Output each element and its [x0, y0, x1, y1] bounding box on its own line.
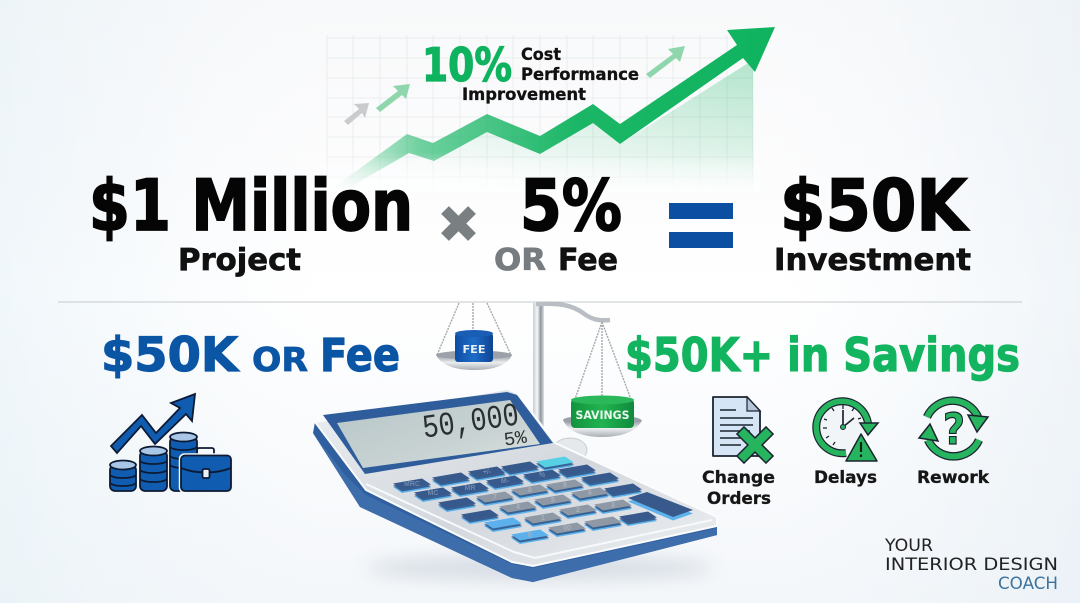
performance label: Performance	[521, 65, 639, 84]
calculator top face	[315, 389, 717, 566]
heading: $50K OR Fee	[101, 328, 400, 383]
keypad: 9	[563, 482, 567, 489]
term: 5% OR Fee: Fee	[558, 243, 618, 278]
label: rework: Rework	[917, 468, 990, 488]
small arrow: light green	[376, 84, 410, 112]
display reading 5%: 5%	[502, 426, 529, 452]
term: $1 Million Project: $1 Million	[89, 165, 413, 247]
display bezel	[323, 392, 553, 474]
calculator body	[313, 389, 717, 582]
multiply sign	[445, 210, 472, 237]
keypad: 00	[563, 525, 571, 532]
icon: coins, rising arrow and briefcase	[110, 394, 232, 492]
keypad: 2	[576, 507, 580, 514]
equation	[89, 165, 971, 278]
keypad: 5	[551, 497, 555, 504]
label: change orders	[702, 468, 775, 509]
coin stack small	[110, 460, 136, 491]
chart bottom fade	[320, 152, 760, 192]
face rim highlight	[366, 484, 712, 558]
coin stack medium	[140, 446, 167, 491]
term: $1 Million Project	[89, 165, 413, 278]
scale beam	[536, 304, 610, 320]
icon: rework arrows: ?	[943, 405, 965, 455]
callout: 10% cost performance improvement	[422, 38, 639, 104]
equals sign	[669, 203, 733, 248]
display reading 50,000: 50,000	[420, 398, 521, 448]
LCD screen	[337, 400, 540, 468]
heading: $50K+ in Savings: $50K+ in Savings	[625, 328, 1020, 382]
logo: your interior design coach	[884, 536, 1058, 593]
keypad: MR	[465, 485, 475, 492]
keypad: %	[539, 472, 546, 479]
10% figure: 10%	[422, 38, 512, 92]
keypad: 0	[528, 532, 532, 539]
term: 5% OR Fee: 5%	[520, 165, 622, 247]
term: 5% OR Fee: OR	[494, 243, 546, 278]
keypad: M-	[501, 478, 510, 485]
heading: $50K OR Fee: OR	[252, 340, 308, 379]
scale pole	[533, 303, 544, 428]
right pan with savings block: SAVINGS	[576, 408, 630, 422]
chart area fill	[333, 60, 753, 190]
keypad: 1	[541, 515, 545, 522]
calculator shadow	[365, 556, 715, 580]
cost label: Cost	[521, 45, 561, 64]
term: $50K Investment: $50K	[780, 165, 970, 247]
left pan with fee block: FEE	[462, 344, 486, 356]
term: $50K Investment	[774, 165, 971, 278]
term: 5% OR Fee	[494, 165, 622, 278]
term: $50K Investment: Investment	[774, 243, 971, 278]
growth chart	[320, 27, 775, 192]
balance scale	[436, 303, 642, 462]
small arrow: light green right	[646, 46, 685, 78]
heading: $50K OR Fee: Fee	[320, 329, 400, 382]
keypad: +/-	[483, 469, 492, 476]
logo: your interior design coach: COACH	[998, 574, 1058, 593]
heading: $50K OR Fee: $50K	[101, 328, 240, 383]
term: $1 Million Project: Project	[178, 243, 301, 278]
label: change orders: Orders	[707, 489, 771, 509]
label: delays: Delays	[814, 468, 877, 488]
keypad: 8	[528, 487, 532, 494]
keypad: MC	[428, 490, 438, 497]
keypad: MRC	[404, 481, 420, 488]
scale base	[553, 438, 587, 462]
icon: change orders document	[713, 397, 766, 456]
rising arrow	[111, 394, 195, 453]
left pan with fee block	[436, 303, 512, 370]
briefcase	[180, 448, 232, 492]
right pan with savings block	[563, 322, 642, 437]
keypad: 7	[493, 494, 497, 501]
keypad	[393, 456, 693, 544]
logo: your interior design coach: INTERIOR DESIGN	[885, 555, 1058, 574]
improvement label: Improvement	[462, 85, 586, 104]
coin stack tall	[170, 432, 197, 491]
small arrow: grey	[344, 103, 369, 125]
icon: delays clock	[816, 401, 878, 461]
label: change orders: Change	[702, 468, 775, 488]
main rising arrow	[333, 27, 775, 190]
icon: rework arrows	[919, 401, 988, 456]
keypad: 6	[588, 490, 592, 497]
calculator	[313, 389, 717, 582]
keypad: 3	[611, 502, 615, 509]
keypad: 4	[516, 504, 520, 511]
logo: your interior design coach: YOUR	[884, 536, 933, 555]
